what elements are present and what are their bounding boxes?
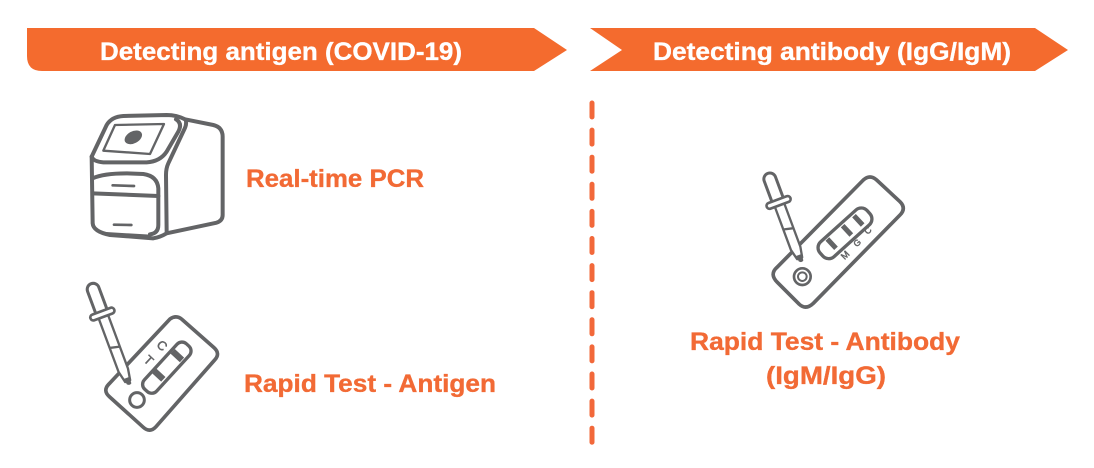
icon: rapid antibody test: C: [862, 225, 874, 236]
icon: rapid antibody test: G: [851, 237, 863, 249]
banner: detecting antibody: [590, 28, 1068, 71]
icon: rapid antibody test: [756, 169, 903, 307]
banner heading: antibody: Detecting antibody (IgG/IgM): [653, 38, 1011, 66]
label: rapid test antibody: (IgM/IgG): [766, 362, 886, 390]
icon: rapid antigen test: [79, 279, 217, 430]
label: rapid test antigen: Rapid Test - Antigen: [244, 370, 496, 398]
label: rapid test antibody: [690, 328, 960, 390]
icon: rapid antigen test: T: [141, 353, 156, 368]
icon: real-time PCR machine: [92, 115, 223, 238]
icon: rapid antibody test: M: [839, 249, 852, 262]
label: rapid test antibody: Rapid Test - Antibody: [690, 328, 960, 356]
banner heading: antigen: Detecting antigen (COVID-19): [100, 38, 462, 66]
dashed divider: [590, 103, 594, 443]
icon: rapid antigen test: C: [154, 338, 170, 354]
banner: detecting antigen: [27, 28, 567, 71]
label: real-time PCR: Real-time PCR: [246, 165, 424, 193]
